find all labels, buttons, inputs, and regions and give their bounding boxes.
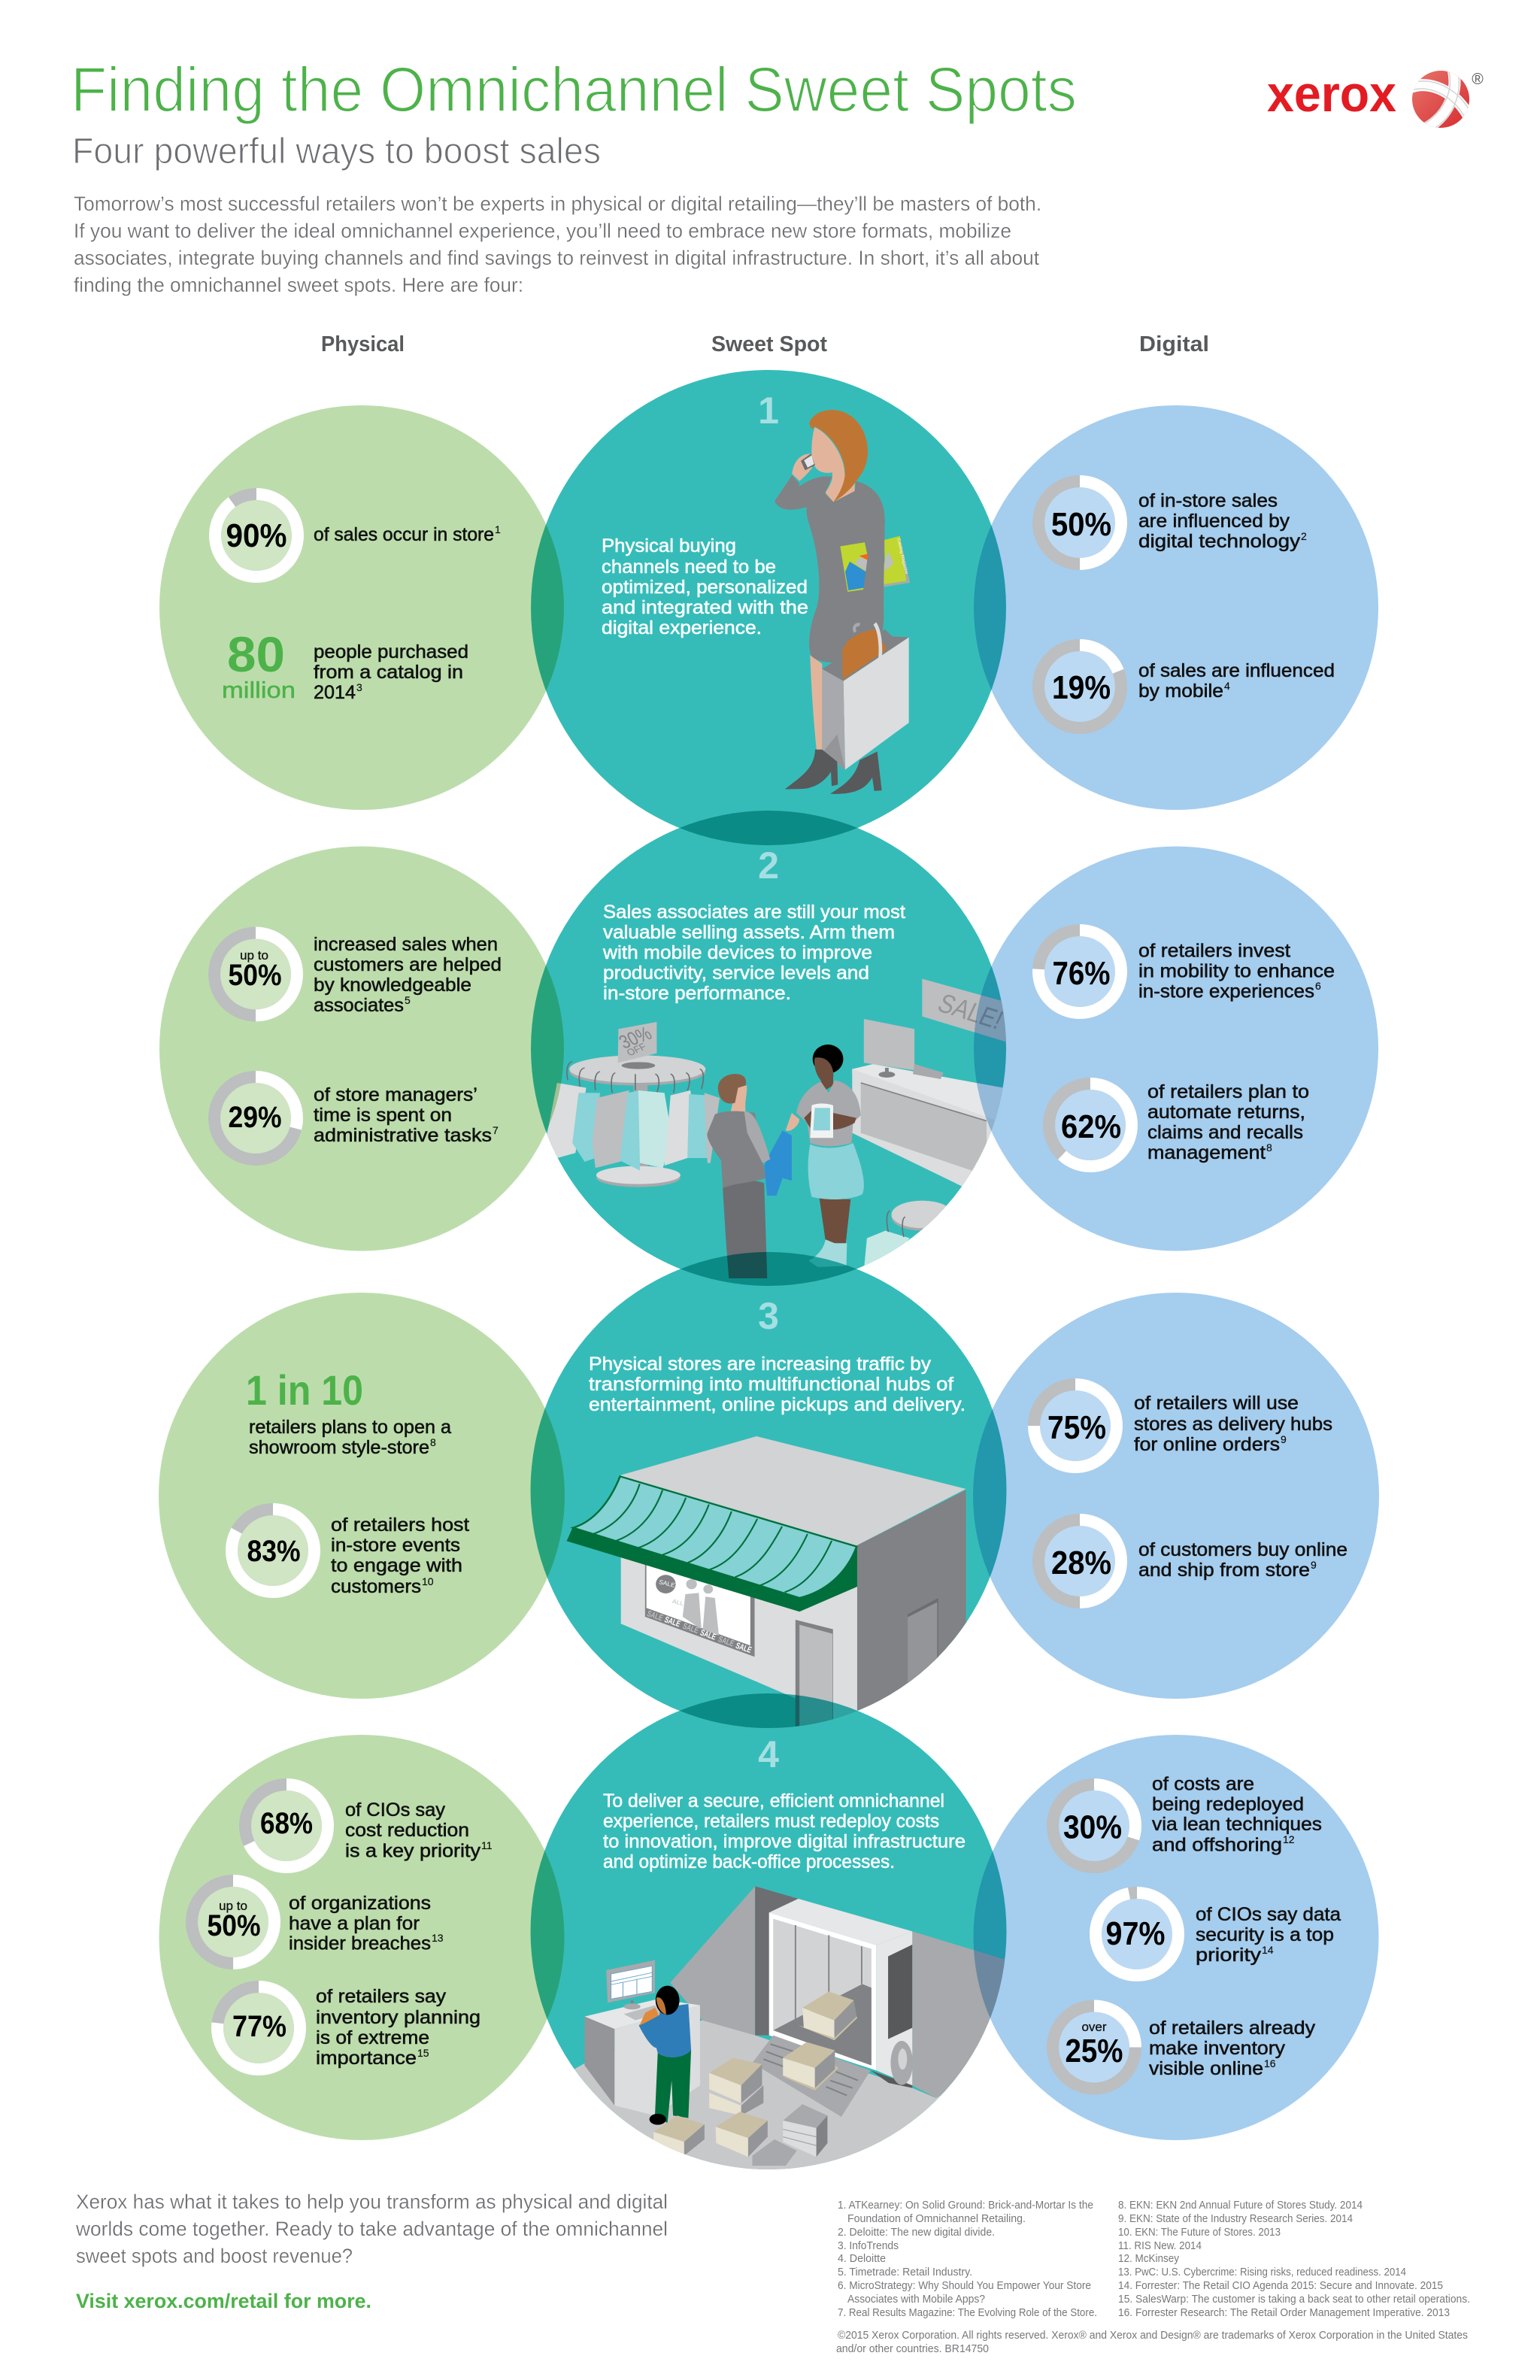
copyright: [836, 2329, 1468, 2355]
stat: over 25% inventory visible: 16: [1264, 2057, 1276, 2069]
text: sweet spot 3: Physical stores are increasing traffic by: [589, 1354, 932, 1375]
stat: up to 50% associates: [214, 932, 502, 1016]
text: sweet spot 1: and integrated with the: [602, 597, 808, 618]
stat: 77% inventory planning: is of extreme: [316, 2027, 429, 2048]
panel: physical circle 4: [159, 1735, 564, 2140]
stat: up to 50% associates: increased sales when: [314, 934, 498, 955]
footnotes right column: 9. EKN: State of the Industry Research Series. 2014: [1118, 2212, 1353, 2225]
stat: 50% digital technology: digital technology: [1138, 531, 1301, 552]
text: sweet spot 1: optimized, personalized: [602, 577, 808, 598]
stat: up to 50% insider breaches: [192, 1881, 444, 1963]
stat: 28% ship from store: of customers buy online: [1138, 1539, 1348, 1560]
stat: 97% data security: 97%: [1105, 1915, 1166, 1952]
footnotes right column: 16. Forrester Research: The Retail Order Management Imperative. 2013: [1118, 2306, 1450, 2319]
panel: digital circle 3: [973, 1293, 1379, 1699]
stat: 68% cost reduction: of CIOs say: [345, 1799, 446, 1821]
step number 4: 4: [758, 1733, 779, 1775]
stat: 19% mobile: 4: [1224, 680, 1230, 692]
illustration: store associate and customer: [547, 979, 1017, 1278]
stat: 62% automate: 62%: [1061, 1108, 1121, 1145]
stat: up to 50% associates: associates: [314, 995, 404, 1016]
footnotes right column: 13. PwC: U.S. Cybercrime: Rising risks, reduced readiness. 2014: [1118, 2266, 1406, 2278]
stat: over 25% inventory visible: of retailers already: [1149, 2018, 1316, 2039]
text: sweet spot 1: Physical buying: [602, 535, 736, 556]
illustration: storefront: SALE: [681, 1621, 700, 1636]
stat: 90%: [215, 494, 501, 577]
footnotes left column: 5. Timetrade: Retail Industry.: [838, 2266, 972, 2278]
illustration: woman shopper: [775, 410, 910, 794]
footnotes right column: [1118, 2199, 1470, 2319]
stat: 68% cost reduction: [245, 1784, 493, 1867]
stat: 62% automate: [1049, 1081, 1309, 1166]
illustration: storefront: SALE: [699, 1628, 717, 1642]
stat: 76% mobility: in mobility to enhance: [1138, 961, 1335, 982]
stat: 77% inventory planning: inventory planning: [316, 2007, 480, 2028]
column heading: Sweet Spot: Sweet Spot: [711, 332, 827, 356]
illustration: warehouse loading dock: [574, 1886, 1005, 2169]
text: sweet spot 4: and optimize back-office processes.: [603, 1851, 895, 1872]
stat: 80 million: million: [222, 677, 296, 703]
panel: sweet spot 2 circle: [531, 811, 1006, 1286]
stat: 62% automate: of retailers plan to: [1147, 1081, 1309, 1102]
stat: 30% costs: 30%: [1063, 1809, 1122, 1845]
footer paragraph: worlds come together. Ready to take advantage of the omnichannel: [75, 2218, 668, 2240]
stat: 90%: 1: [495, 523, 501, 535]
illustration: store associate and customer: SALE!: [933, 989, 1008, 1035]
stat: 29% managers: [214, 1077, 499, 1160]
stat: 97% data security: security is a top: [1196, 1924, 1334, 1945]
stat: 19% mobile: by mobile: [1138, 681, 1223, 702]
stat: up to 50% insider breaches: 13: [432, 1932, 444, 1944]
stat: 75% delivery hubs: for online orders: [1134, 1434, 1280, 1455]
stat: 68% cost reduction: cost reduction: [345, 1820, 469, 1841]
illustration: storefront: [567, 1436, 966, 1728]
stat: 30% costs: [1053, 1773, 1322, 1867]
illustration: woman shopper: Catalog Magazine: [896, 538, 908, 575]
footnotes left column: 4. Deloitte: [838, 2252, 886, 2265]
stat: 80 million: 2014: [314, 682, 356, 703]
stat: 83% events: 10: [422, 1575, 434, 1587]
footnotes left column: 7. Real Results Magazine: The Evolving Role of the Store.: [838, 2306, 1097, 2319]
panel: physical circle 3: [159, 1293, 565, 1699]
footnotes left column: 2. Deloitte: The new digital divide.: [838, 2226, 995, 2239]
stat: 83% events: customers: [331, 1576, 421, 1597]
logo: xerox: [1268, 71, 1483, 128]
text: sweet spot 1: [602, 535, 808, 638]
footnotes left column: 6. MicroStrategy: Why Should You Empower Your Store: [838, 2279, 1091, 2292]
stat: 76% mobility: [1038, 930, 1335, 1013]
footnotes right column: 8. EKN: EKN 2nd Annual Future of Stores Study. 2014: [1118, 2199, 1363, 2212]
stat: 83% events: of retailers host: [331, 1514, 469, 1536]
illustration: storefront: SALE: [717, 1635, 735, 1648]
stat: 1 in 10: 8: [430, 1436, 436, 1448]
stat: over 25% inventory visible: over: [1081, 2020, 1107, 2034]
panel: digital circle 4: [973, 1735, 1379, 2140]
logo: xerox: ®: [1472, 71, 1484, 88]
stat: up to 50% associates: 50%: [229, 959, 281, 992]
stat: 77% inventory planning: 77%: [232, 2010, 286, 2043]
stat: 77% inventory planning: importance: [316, 2048, 417, 2069]
text: sweet spot 4: experience, retailers must redeploy costs: [603, 1811, 939, 1832]
panel: sweet spot 1 circle: [531, 370, 1006, 845]
stat: 83% events: 83%: [247, 1535, 301, 1568]
stat: 50% digital technology: 2: [1301, 530, 1307, 542]
stat: 62% automate: management: [1147, 1142, 1266, 1163]
stat: 30% costs: of costs are: [1152, 1773, 1254, 1794]
intro paragraph: If you want to deliver the ideal omnichannel experience, you’ll need to embrace new store formats, mobilize: [74, 220, 1011, 242]
stat: 19% mobile: of sales are influenced: [1138, 660, 1335, 681]
footnotes left column: [838, 2199, 1097, 2319]
stat: 80 million: 3: [356, 681, 362, 693]
footnotes left column: 1. ATKearney: On Solid Ground: Brick-and-Mortar Is the: [838, 2199, 1093, 2212]
panel: sweet spot 4 circle: [531, 1693, 1006, 2169]
stat: up to 50% insider breaches: of organizations: [289, 1893, 431, 1914]
stat: 29% managers: 7: [493, 1124, 499, 1136]
footnotes right column: 12. McKinsey: [1118, 2252, 1179, 2265]
title: Finding the Omnichannel Sweet Spots: [71, 54, 1077, 125]
logo: xerox: xerox: [1267, 65, 1396, 123]
text: sweet spot 1: channels need to be: [602, 556, 776, 578]
stat: 62% automate: automate returns,: [1147, 1102, 1305, 1123]
stat: 50% digital technology: 50%: [1051, 506, 1111, 543]
text: sweet spot 2: productivity, service levels and: [603, 963, 869, 984]
step number 2: 2: [758, 844, 779, 887]
stat: 97% data security: of CIOs say data: [1196, 1904, 1341, 1925]
stat: 50% digital technology: of in-store sales: [1138, 490, 1278, 511]
footnotes right column: 14. Forrester: The Retail CIO Agenda 2015: Secure and Innovate. 2015: [1118, 2279, 1443, 2292]
illustration: storefront: SALE: [663, 1615, 682, 1629]
step number 1: 1: [758, 390, 779, 432]
stat: 50% digital technology: [1038, 481, 1307, 564]
stat: 97% data security: [1096, 1893, 1341, 1975]
footer paragraph: sweet spots and boost revenue?: [76, 2245, 353, 2267]
stat: 30% costs: 12: [1283, 1833, 1295, 1845]
footnotes left column: Associates with Mobile Apps?: [847, 2293, 985, 2306]
stat: up to 50% associates: customers are helped: [314, 954, 502, 975]
stat: 19% mobile: [1038, 645, 1335, 728]
copyright: ©2015 Xerox Corporation. All rights reserved. Xerox® and Xerox and Design® are trademarks of Xerox Corporation in the United States: [838, 2329, 1468, 2342]
intro paragraph: Tomorrow’s most successful retailers won’t be experts in physical or digital retailing—they’ll be masters of both.: [74, 193, 1041, 215]
stat: over 25% inventory visible: 25%: [1065, 2033, 1123, 2069]
call to action: Visit xerox.com/retail for more.: [76, 2290, 371, 2312]
illustration: storefront: ALL: [671, 1598, 684, 1607]
footnotes left column: 3. InfoTrends: [838, 2239, 899, 2252]
stat: up to 50% associates: up to: [240, 948, 268, 963]
stat: 75% delivery hubs: 75%: [1047, 1409, 1106, 1446]
stat: up to 50% insider breaches: have a plan for: [289, 1913, 420, 1934]
stat: 68% cost reduction: 68%: [260, 1807, 313, 1840]
panel: digital circle 2: [974, 847, 1378, 1251]
stat: 62% automate: 8: [1266, 1141, 1272, 1154]
panel: sweet spot 3 circle: [531, 1252, 1006, 1728]
stat: 30% costs: via lean techniques: [1152, 1814, 1322, 1835]
stat: 30% costs: and offshoring: [1152, 1835, 1282, 1856]
stat: 76% mobility: in-store experiences: [1138, 981, 1314, 1002]
stat: 29% managers: of store managers’: [314, 1084, 477, 1105]
text: sweet spot 2: with mobile devices to improve: [602, 942, 872, 963]
text: sweet spot 4: [603, 1790, 966, 1872]
stat: 19% mobile: 19%: [1052, 669, 1111, 706]
column heading: Physical: Physical: [321, 332, 405, 356]
step number 3: 3: [758, 1295, 779, 1337]
stat: up to 50% insider breaches: insider breaches: [289, 1933, 431, 1954]
footnotes right column: 11. RIS New. 2014: [1118, 2239, 1202, 2252]
text: sweet spot 4: To deliver a secure, efficient omnichannel: [603, 1790, 944, 1812]
stat: 90%: 90%: [226, 517, 287, 554]
subtitle: Four powerful ways to boost sales: [72, 132, 601, 171]
stat: 77% inventory planning: [217, 1986, 480, 2069]
stat: 75% delivery hubs: 9: [1281, 1433, 1287, 1445]
stat: up to 50% associates: 5: [405, 994, 411, 1006]
stat: 29% managers: administrative tasks: [314, 1125, 492, 1146]
stat: over 25% inventory visible: make inventory: [1149, 2038, 1286, 2059]
stat: 80 million: 80: [227, 626, 285, 682]
text: sweet spot 2: [602, 902, 905, 1004]
stat: 28% ship from store: and ship from store: [1138, 1560, 1310, 1581]
stat: 97% data security: 14: [1262, 1944, 1274, 1956]
stat: 83% events: to engage with: [331, 1555, 462, 1576]
stat: over 25% inventory visible: visible online: [1149, 2058, 1263, 2079]
text: sweet spot 2: Sales associates are still your most: [603, 902, 905, 923]
panel: physical circle 1: [159, 405, 564, 810]
stat: 50% digital technology: are influenced by: [1138, 511, 1290, 532]
stat: over 25% inventory visible: [1053, 2006, 1316, 2089]
text: sweet spot 3: entertainment, online pickups and delivery.: [589, 1394, 966, 1415]
stat: 80 million: people purchased: [314, 641, 468, 662]
stat: 62% automate: claims and recalls: [1147, 1122, 1303, 1143]
stat: 90%: of sales occur in store: [314, 524, 494, 545]
text: sweet spot 2: valuable selling assets. Arm them: [603, 922, 895, 943]
stat: 28% ship from store: 9: [1311, 1559, 1317, 1571]
copyright: and/or other countries. BR14750: [836, 2342, 989, 2355]
stat: 83% events: in-store events: [331, 1535, 460, 1556]
text: sweet spot 1: digital experience.: [602, 617, 762, 638]
stat: 75% delivery hubs: of retailers will use: [1134, 1393, 1299, 1414]
stat: 76% mobility: of retailers invest: [1138, 940, 1290, 961]
stat: 30% costs: being redeployed: [1152, 1794, 1304, 1815]
stat: 68% cost reduction: is a key priority: [345, 1841, 481, 1862]
stat: 1 in 10: retailers plans to open a: [249, 1417, 451, 1438]
stat: 28% ship from store: 28%: [1051, 1545, 1111, 1581]
footnotes right column: 10. EKN: The Future of Stores. 2013: [1118, 2226, 1281, 2239]
panel: digital circle 1: [974, 405, 1378, 810]
stat: 29% managers: time is spent on: [314, 1105, 452, 1126]
illustration: storefront: SALE: [646, 1609, 664, 1623]
illustration: storefront: SALE: [734, 1641, 753, 1655]
stat: 80 million: from a catalog in: [314, 662, 463, 683]
footer paragraph: Xerox has what it takes to help you transform as physical and digital: [76, 2191, 668, 2213]
footnotes right column: 15. SalesWarp: The customer is taking a back seat to other retail operations.: [1118, 2293, 1470, 2306]
illustration: store associate and customer: OFF: [624, 1041, 648, 1058]
stat: 29% managers: 29%: [229, 1101, 281, 1134]
stat: up to 50% associates: by knowledgeable: [314, 975, 471, 996]
illustration: storefront: SALE: [658, 1578, 676, 1589]
column heading: Digital: Digital: [1139, 332, 1209, 356]
stat: 83% events: [232, 1509, 469, 1597]
stat: 1 in 10: [246, 1366, 451, 1458]
stat: 75% delivery hubs: [1034, 1384, 1332, 1467]
illustration: store associate and customer: 30%: [615, 1023, 655, 1053]
stat: 76% mobility: 76%: [1053, 955, 1110, 992]
text: sweet spot 3: [589, 1354, 966, 1415]
intro paragraph: finding the omnichannel sweet spots. Here are four:: [74, 274, 523, 296]
stat: 77% inventory planning: 15: [417, 2047, 429, 2059]
stat: 1 in 10: showroom style-store: [249, 1437, 429, 1458]
intro paragraph: [74, 193, 1041, 296]
footer paragraph: [75, 2191, 668, 2267]
stat: 68% cost reduction: 11: [481, 1839, 493, 1851]
stat: 97% data security: priority: [1196, 1945, 1262, 1966]
stat: up to 50% insider breaches: 50%: [208, 1909, 260, 1942]
footnotes left column: Foundation of Omnichannel Retailing.: [847, 2212, 1026, 2225]
stat: 76% mobility: 6: [1315, 980, 1321, 992]
text: sweet spot 2: in-store performance.: [603, 983, 791, 1004]
stat: up to 50% insider breaches: up to: [219, 1899, 247, 1913]
text: sweet spot 4: to innovation, improve digital infrastructure: [603, 1831, 966, 1852]
stat: 80 million: [222, 626, 468, 703]
panel: physical circle 2: [159, 847, 564, 1251]
text: sweet spot 3: transforming into multifunctional hubs of: [589, 1374, 953, 1395]
stat: 1 in 10: 1 in 10: [246, 1366, 363, 1414]
stat: 28% ship from store: [1038, 1520, 1348, 1602]
intro paragraph: associates, integrate buying channels and find savings to reinvest in digital infrastructure. In short, it’s all about: [74, 247, 1039, 269]
stat: 77% inventory planning: of retailers say: [316, 1986, 447, 2007]
stat: 75% delivery hubs: stores as delivery hubs: [1134, 1414, 1332, 1435]
